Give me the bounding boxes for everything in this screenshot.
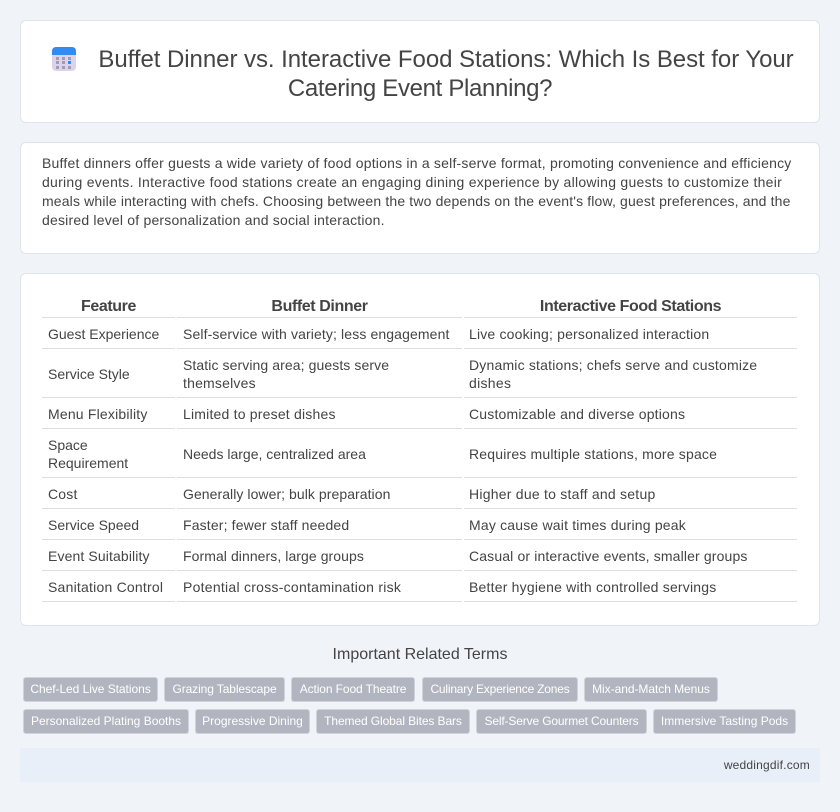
title panel (20, 20, 820, 123)
table row: service speed: May cause wait times during peak (469, 517, 686, 533)
table row: event suitability: Formal dinners, large groups (183, 548, 364, 564)
related terms tags: Culinary Experience Zones (430, 682, 570, 696)
related terms tags: Themed Global Bites Bars (324, 714, 462, 728)
table row: menu flexibility (48, 406, 685, 422)
table header: Interactive Food Stations (540, 298, 721, 315)
table row: space requirement: Requirement (48, 455, 128, 471)
table row: space requirement: Needs large, centralized area (183, 446, 366, 462)
related terms tags: Personalized Plating Booths (31, 714, 181, 728)
related terms heading: Important Related Terms (333, 646, 507, 663)
table row: service style: themselves (183, 375, 256, 391)
intro text: meals while interacting with chefs. Choosing between the two depends on the event's flow, guest preferences, and the (42, 193, 791, 209)
table row: service style: Static serving area; guests serve (183, 357, 389, 373)
table row: event suitability (48, 548, 748, 564)
table row: service style: Dynamic stations; chefs serve and customize (469, 357, 757, 373)
table row: sanitation control: Better hygiene with controlled servings (469, 579, 716, 595)
table row: cost (48, 486, 656, 502)
table row: guest experience: Guest Experience (48, 326, 159, 342)
intro panel (20, 142, 820, 254)
footer bar (20, 748, 820, 782)
related terms tags: Self-Serve Gourmet Counters (484, 714, 638, 728)
icon: calendar (52, 47, 76, 71)
table row: event suitability: Casual or interactive events, smaller groups (469, 548, 748, 564)
table row: service speed: Faster; fewer staff needed (183, 517, 349, 533)
related terms tags (23, 677, 796, 734)
table row: guest experience: Live cooking; personalized interaction (469, 326, 709, 342)
table row: sanitation control: Potential cross-contamination risk (183, 579, 401, 595)
table row: space requirement: Space (48, 437, 88, 453)
table row: service speed: Service Speed (48, 517, 139, 533)
table header (81, 298, 721, 315)
table row: service speed (48, 517, 686, 533)
table header: Buffet Dinner (271, 298, 368, 315)
intro text (42, 155, 792, 228)
table row: guest experience: Self-service with variety; less engagement (183, 326, 450, 342)
intro text: Buffet dinners offer guests a wide variety of food options in a self-serve format, promoting convenience and efficiency (42, 155, 792, 171)
related terms tags: Chef-Led Live Stations (30, 682, 151, 696)
title (98, 46, 794, 102)
table row: sanitation control (48, 579, 716, 595)
table row: space requirement (48, 437, 717, 471)
table row: cost: Generally lower; bulk preparation (183, 486, 390, 502)
table row: event suitability: Event Suitability (48, 548, 150, 564)
table row: cost: Cost (48, 486, 78, 502)
table row: service style (48, 357, 757, 391)
footer source: weddingdif.com (724, 758, 810, 772)
table row: cost: Higher due to staff and setup (469, 486, 656, 502)
intro text: during events. Interactive food stations create an engaging dining experience by allowing guests to customize their (42, 174, 782, 190)
table row: menu flexibility: Menu Flexibility (48, 406, 148, 422)
title: Buffet Dinner vs. Interactive Food Stations: Which Is Best for Your (98, 46, 794, 73)
table row: menu flexibility: Customizable and diverse options (469, 406, 685, 422)
table header: Feature (81, 298, 136, 315)
table row: service style: Service Style (48, 366, 130, 382)
comparison table panel (20, 273, 820, 626)
table row: sanitation control: Sanitation Control (48, 579, 163, 595)
related terms tags: Immersive Tasting Pods (661, 714, 788, 728)
table row: menu flexibility: Limited to preset dishes (183, 406, 336, 422)
table row: guest experience (48, 326, 709, 342)
table row: space requirement: Requires multiple stations, more space (469, 446, 717, 462)
title: Catering Event Planning? (288, 75, 552, 102)
table row: service style: dishes (469, 375, 511, 391)
related terms tags: Grazing Tablescape (172, 682, 277, 696)
related terms tags: Mix-and-Match Menus (592, 682, 710, 696)
intro text: desired level of personalization and social interaction. (42, 212, 385, 228)
related terms tags: Action Food Theatre (300, 682, 406, 696)
related terms tags: Progressive Dining (202, 714, 303, 728)
